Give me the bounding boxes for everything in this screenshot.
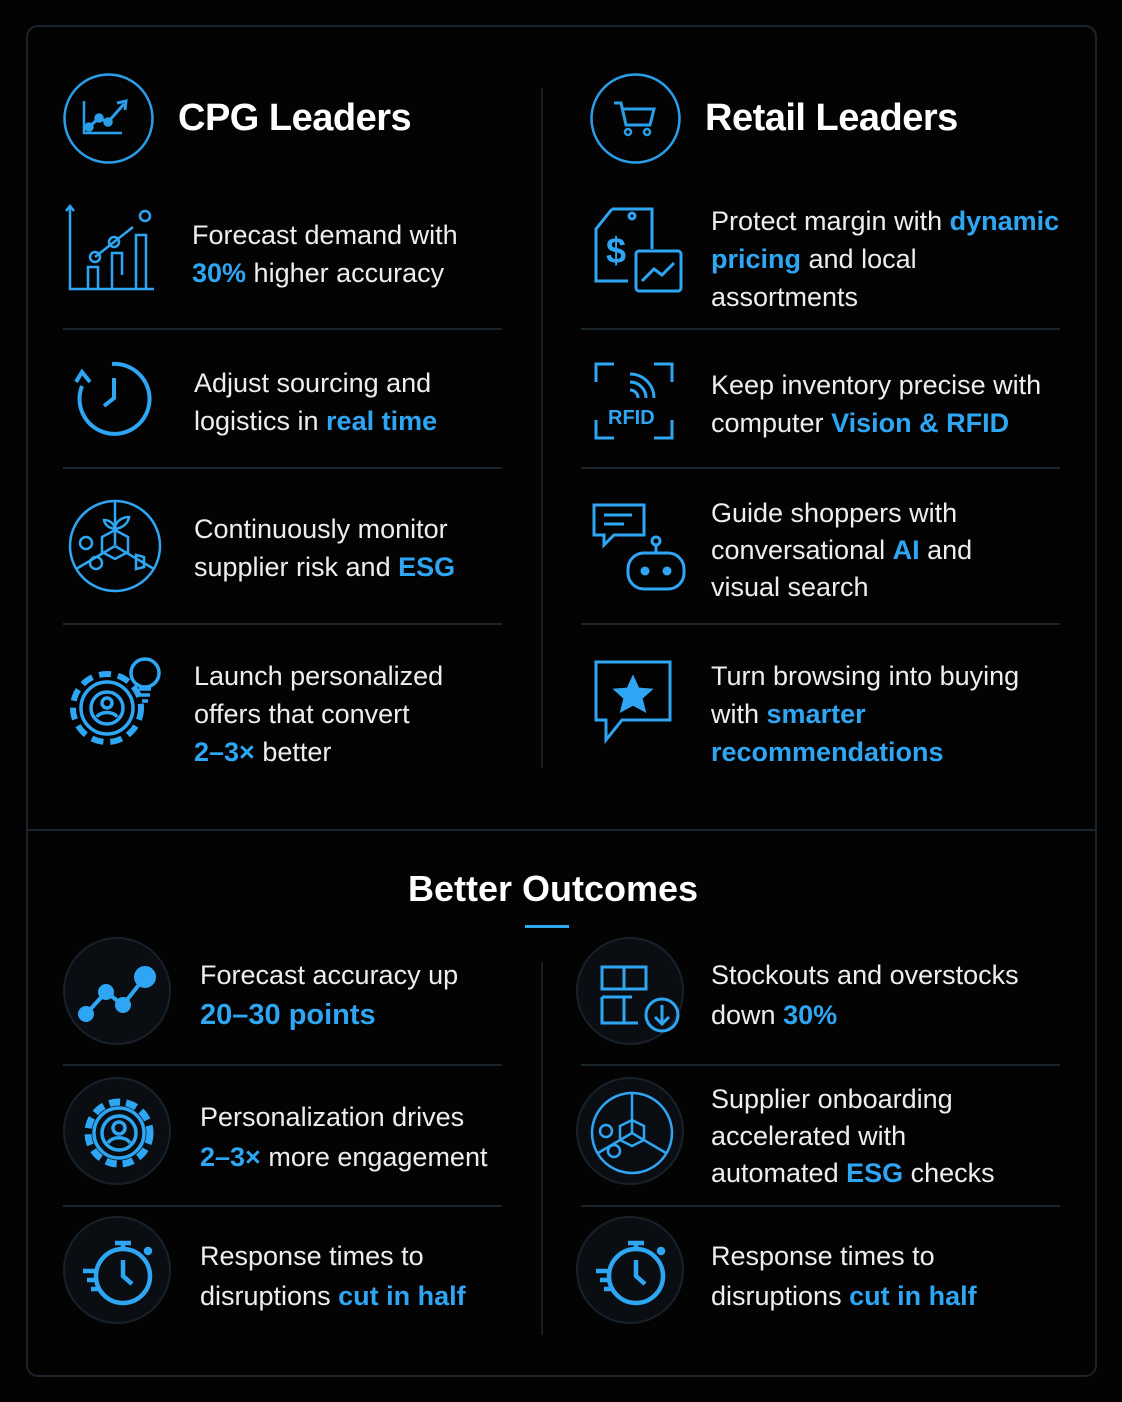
item: CPG supplier risk (68, 500, 455, 592)
text: automated ESG checks (711, 1158, 995, 1188)
icon: price tag chart: $ (606, 230, 626, 271)
icon: CPG header circle (63, 73, 154, 164)
text: Personalization drives (200, 1102, 464, 1132)
text: disruptions cut in half (200, 1281, 466, 1311)
heading: CPG Leaders: CPG Leaders (178, 97, 411, 139)
icon: ESG globe (68, 500, 162, 592)
outcome: stockouts (576, 937, 1019, 1045)
item: CPG sourcing (74, 362, 437, 436)
text: pricing and local (711, 244, 917, 274)
text (711, 960, 1019, 1030)
item: Retail RFID (594, 362, 1041, 440)
text: Adjust sourcing and (194, 368, 431, 398)
text (711, 206, 1059, 312)
text: 30% higher accuracy (192, 258, 444, 288)
text (711, 498, 972, 602)
text: conversational AI and (711, 535, 972, 565)
text (194, 661, 443, 767)
text: logistics in real time (194, 406, 437, 436)
text (200, 1241, 466, 1311)
text: Keep inventory precise with (711, 370, 1041, 400)
text: Forecast accuracy up (200, 960, 458, 990)
text: accelerated with (711, 1121, 906, 1151)
icon: line chart circle (63, 937, 171, 1045)
item: Retail dynamic pricing (594, 206, 1059, 312)
icon: price tag chart (594, 208, 682, 292)
icon: stopwatch circle (63, 1216, 171, 1324)
outcome: personalization (63, 1077, 488, 1185)
text: Stockouts and overstocks (711, 960, 1019, 990)
icon: stopwatch circle (576, 1216, 684, 1324)
item: Retail recommendations (594, 660, 1019, 767)
text (711, 661, 1019, 767)
item: CPG personalized offers (70, 657, 443, 767)
text: disruptions cut in half (711, 1281, 977, 1311)
text: offers that convert (194, 699, 410, 729)
text: Protect margin with dynamic (711, 206, 1059, 236)
text: Turn browsing into buying (711, 661, 1019, 691)
text: with smarter (711, 699, 866, 729)
heading: Retail Leaders: Retail Leaders (705, 97, 958, 139)
text: visual search (711, 572, 869, 602)
icon: RFID frame (594, 362, 674, 440)
text (711, 1241, 977, 1311)
text: Supplier onboarding (711, 1084, 953, 1114)
icon: ESG circle (576, 1077, 684, 1185)
item: CPG forecast (65, 204, 458, 290)
text: Response times to (711, 1241, 935, 1271)
text: supplier risk and ESG (194, 552, 455, 582)
outcome: supplier onboarding (576, 1077, 995, 1188)
text: 2–3× more engagement (200, 1142, 487, 1172)
text: Launch personalized (194, 661, 443, 691)
icon: bar chart (65, 204, 154, 290)
icon: chat robot (592, 504, 686, 590)
icon: gear user circle (63, 1077, 171, 1185)
text (711, 1084, 995, 1188)
text (711, 370, 1041, 438)
outcome: response times left (63, 1216, 466, 1324)
text (194, 368, 437, 436)
text (192, 220, 458, 288)
text (194, 514, 455, 582)
text: assortments (711, 282, 858, 312)
text: computer Vision & RFID (711, 408, 1009, 438)
icon: star bubble (594, 660, 672, 744)
text: down 30% (711, 1000, 837, 1030)
icon: gear bulb (70, 657, 161, 745)
icon: RFID frame: RFID (608, 407, 655, 429)
text: Forecast demand with (192, 220, 458, 250)
icon: clock arrow (74, 362, 152, 436)
text: recommendations (711, 737, 944, 767)
text: 20–30 points (200, 999, 376, 1031)
outcome: response times right (576, 1216, 977, 1324)
text: Guide shoppers with (711, 498, 957, 528)
text: Continuously monitor (194, 514, 448, 544)
text: Response times to (200, 1241, 424, 1271)
item: Retail conversational AI (592, 498, 972, 602)
outcome: forecast accuracy (63, 937, 458, 1045)
heading: Better Outcomes: Better Outcomes (408, 868, 698, 909)
text (200, 1102, 488, 1172)
icon: boxes down circle (576, 937, 684, 1045)
text (200, 960, 458, 1031)
text: 2–3× better (194, 737, 331, 767)
icon: Retail header cart circle (590, 73, 681, 164)
